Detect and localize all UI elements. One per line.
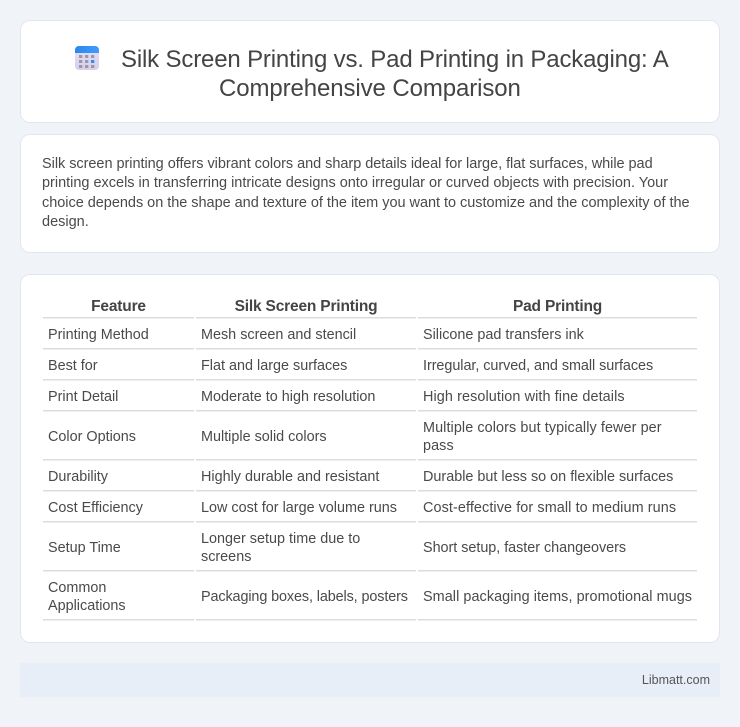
row: cost efficiency: Cost-effective for small to medium runs [423,500,676,516]
row: setup time: screens [201,549,251,565]
row: printing method: Mesh screen and stencil [201,327,356,343]
row: printing method: Silicone pad transfers ink [423,327,584,343]
row: cost efficiency: Cost Efficiency [48,500,143,516]
intro text: design. [42,214,89,230]
row: printing method: Printing Method [48,327,149,343]
row: setup time: Setup Time [48,540,121,556]
row: best for: Irregular, curved, and small surfaces [423,358,653,374]
row: color options: Multiple colors but typically fewer per [423,420,662,436]
row: print detail: Moderate to high resolution [201,389,375,405]
row: common applications: Applications [48,598,126,614]
row: print detail: High resolution with fine details [423,389,625,405]
row: setup time [48,531,626,565]
table header: Silk Screen Printing [235,298,377,315]
row: durability: Highly durable and resistant [201,469,379,485]
row: durability: Durability [48,469,108,485]
table header: Feature [91,298,146,315]
title: Comprehensive Comparison [219,75,521,102]
title [121,46,669,102]
row: printing method [48,327,584,343]
row lines [43,317,697,621]
row: print detail [48,389,625,405]
icon: calendar [75,46,99,70]
title: Silk Screen Printing vs. Pad Printing in Packaging: A [121,46,669,73]
row: setup time: Longer setup time due to [201,531,360,547]
panel: introduction [20,134,720,253]
row: best for: Flat and large surfaces [201,358,347,374]
intro text: Silk screen printing offers vibrant colors and sharp details ideal for large, flat surfaces, while pad [42,156,653,172]
panel: title card [20,20,720,123]
row: common applications: Packaging boxes, labels, posters [201,589,408,605]
intro text [42,156,690,230]
row: setup time: Short setup, faster changeovers [423,540,626,556]
row: color options: Multiple solid colors [201,429,327,445]
row: color options: Color Options [48,429,136,445]
row: durability [48,469,673,485]
row: best for [48,358,653,374]
table header: Pad Printing [513,298,602,315]
footer [20,663,720,697]
intro text: printing excels in transferring intricate designs onto irregular or curved objects with precision. Your [42,175,668,191]
row: print detail: Print Detail [48,389,118,405]
row: common applications [48,580,692,614]
intro text: choice depends on the shape and texture of the item you want to customize and the complexity of the [42,195,690,211]
footer credit: Libmatt.com [642,673,710,687]
row: cost efficiency [48,500,676,516]
row: durability: Durable but less so on flexible surfaces [423,469,673,485]
panel: comparison table [20,274,720,643]
row: color options [48,420,662,454]
row: common applications: Common [48,580,106,596]
row: best for: Best for [48,358,98,374]
row: common applications: Small packaging items, promotional mugs [423,589,692,605]
row: cost efficiency: Low cost for large volume runs [201,500,397,516]
table header [91,298,602,315]
row: color options: pass [423,438,454,454]
